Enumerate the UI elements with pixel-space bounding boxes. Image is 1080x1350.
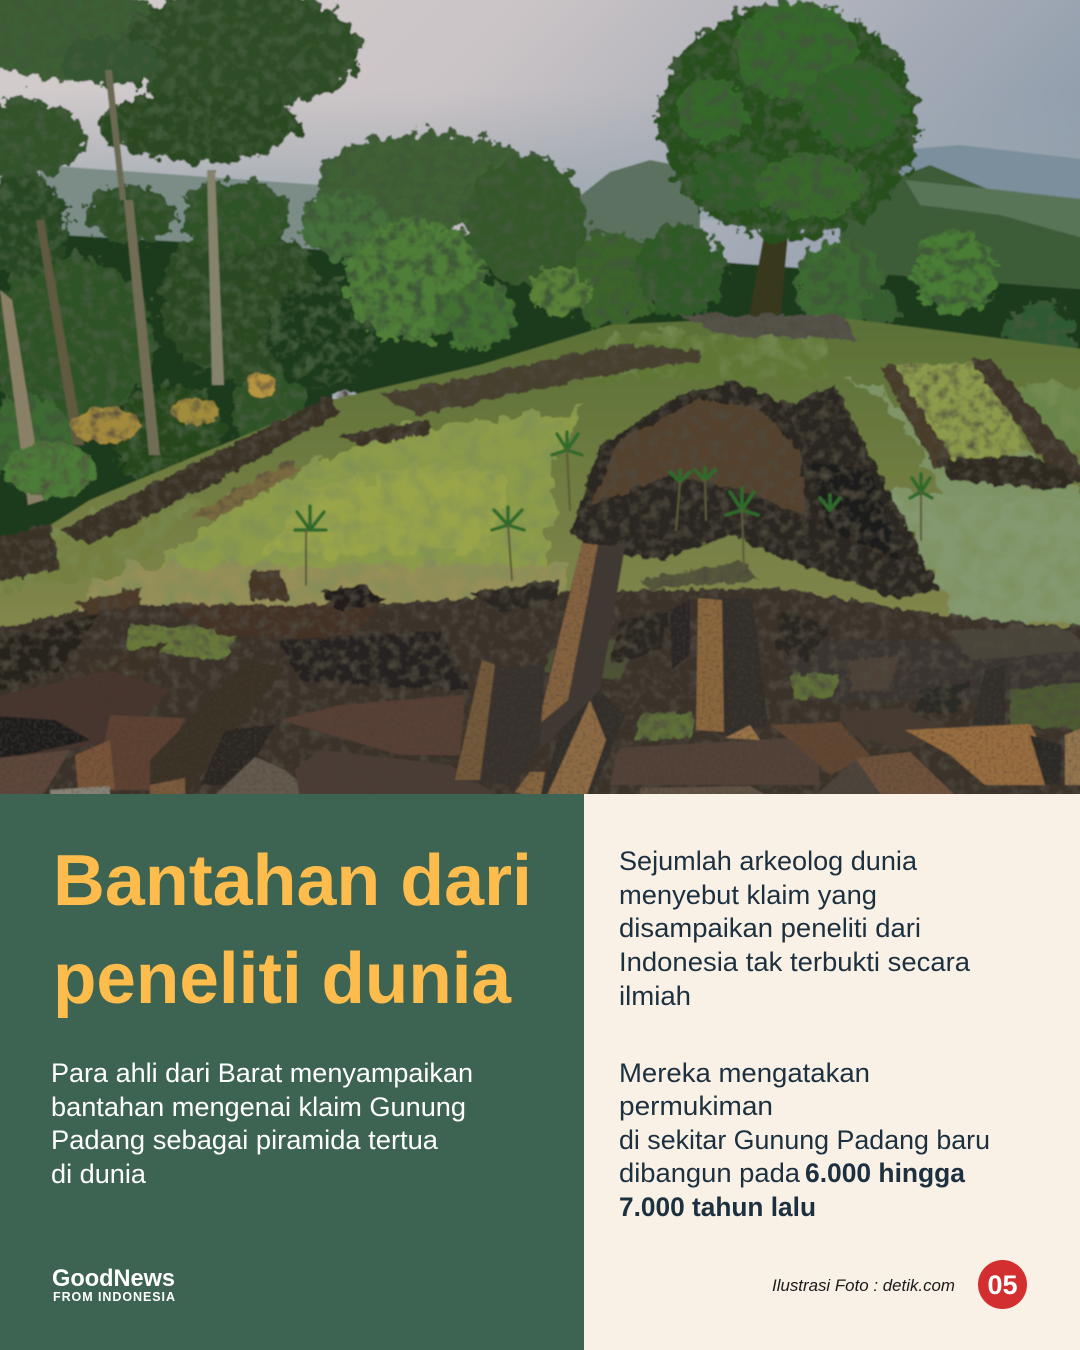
text block: left intro: Para ahli dari Barat menyampaikan — [51, 1058, 473, 1088]
tree trunks — [0, 69, 226, 506]
text block: second paragraph: Mereka mengatakan — [619, 1058, 870, 1088]
upper rock terrace line — [0, 315, 860, 585]
standing stone, right — [670, 598, 768, 735]
left tree canopy — [0, 0, 360, 275]
text block: first paragraph: disampaikan peneliti dari — [619, 913, 921, 943]
page number badge: 05 — [987, 1270, 1018, 1300]
heading: Bantahan dari peneliti dunia: Bantahan dari — [53, 841, 532, 921]
sky haze near horizon — [0, 114, 716, 220]
text block: left intro: di dunia — [51, 1159, 147, 1189]
text block: first paragraph: Sejumlah arkeolog dunia — [619, 846, 918, 876]
text block: left intro: Padang sebagai piramida tertua — [51, 1125, 439, 1155]
central trees — [300, 132, 590, 349]
dark stepped pyramid mound — [570, 380, 940, 600]
logo: GoodNews from Indonesia: FROM INDONESIA — [53, 1290, 175, 1304]
text block: second paragraph: 7.000 tahun lalu — [619, 1192, 816, 1222]
text block: second paragraph: 6.000 hingga — [805, 1158, 966, 1188]
text block: second paragraph — [619, 1058, 990, 1222]
text block: first paragraph: Indonesia tak terbukti secara — [619, 947, 971, 977]
fallen stones, right foreground — [515, 665, 1080, 800]
text block: left intro — [51, 1058, 473, 1189]
fallen stones, left foreground — [0, 660, 505, 800]
text block: first paragraph: ilmiah — [619, 981, 691, 1011]
text block: second paragraph: di sekitar Gunung Padang baru — [619, 1125, 990, 1155]
panel: green left panel — [0, 794, 584, 1350]
right rectangular terrace — [880, 358, 1080, 490]
standing stone, left — [455, 543, 625, 800]
logo: GoodNews from Indonesia — [52, 1265, 175, 1304]
text block: second paragraph: dibangun pada — [619, 1158, 801, 1188]
heading: Bantahan dari peneliti dunia — [53, 841, 532, 1019]
large tree on the summit — [658, 0, 918, 322]
distant hills — [40, 144, 1080, 290]
text block: first paragraph — [619, 846, 971, 1011]
page number badge — [978, 1260, 1027, 1309]
heading: Bantahan dari peneliti dunia: peneliti dunia — [53, 939, 512, 1019]
forest band — [0, 220, 1075, 495]
text block: first paragraph: menyebut klaim yang — [619, 880, 877, 910]
photo credit: Ilustrasi Foto : detik.com — [772, 1276, 955, 1295]
foreground rock field — [0, 570, 1080, 810]
logo: GoodNews from Indonesia: GoodNews — [52, 1265, 175, 1292]
grass shading — [0, 335, 1080, 625]
sky — [0, 0, 1080, 269]
young palm plants — [295, 432, 932, 585]
forest base — [0, 234, 1080, 537]
text block: left intro: bantahan mengenai klaim Gunung — [51, 1092, 466, 1122]
grass hill slope — [0, 315, 1080, 650]
tropical shrubs at left — [5, 373, 356, 498]
text block: second paragraph: permukiman — [619, 1091, 773, 1121]
photo: Gunung Padang hill site — [0, 0, 1080, 810]
